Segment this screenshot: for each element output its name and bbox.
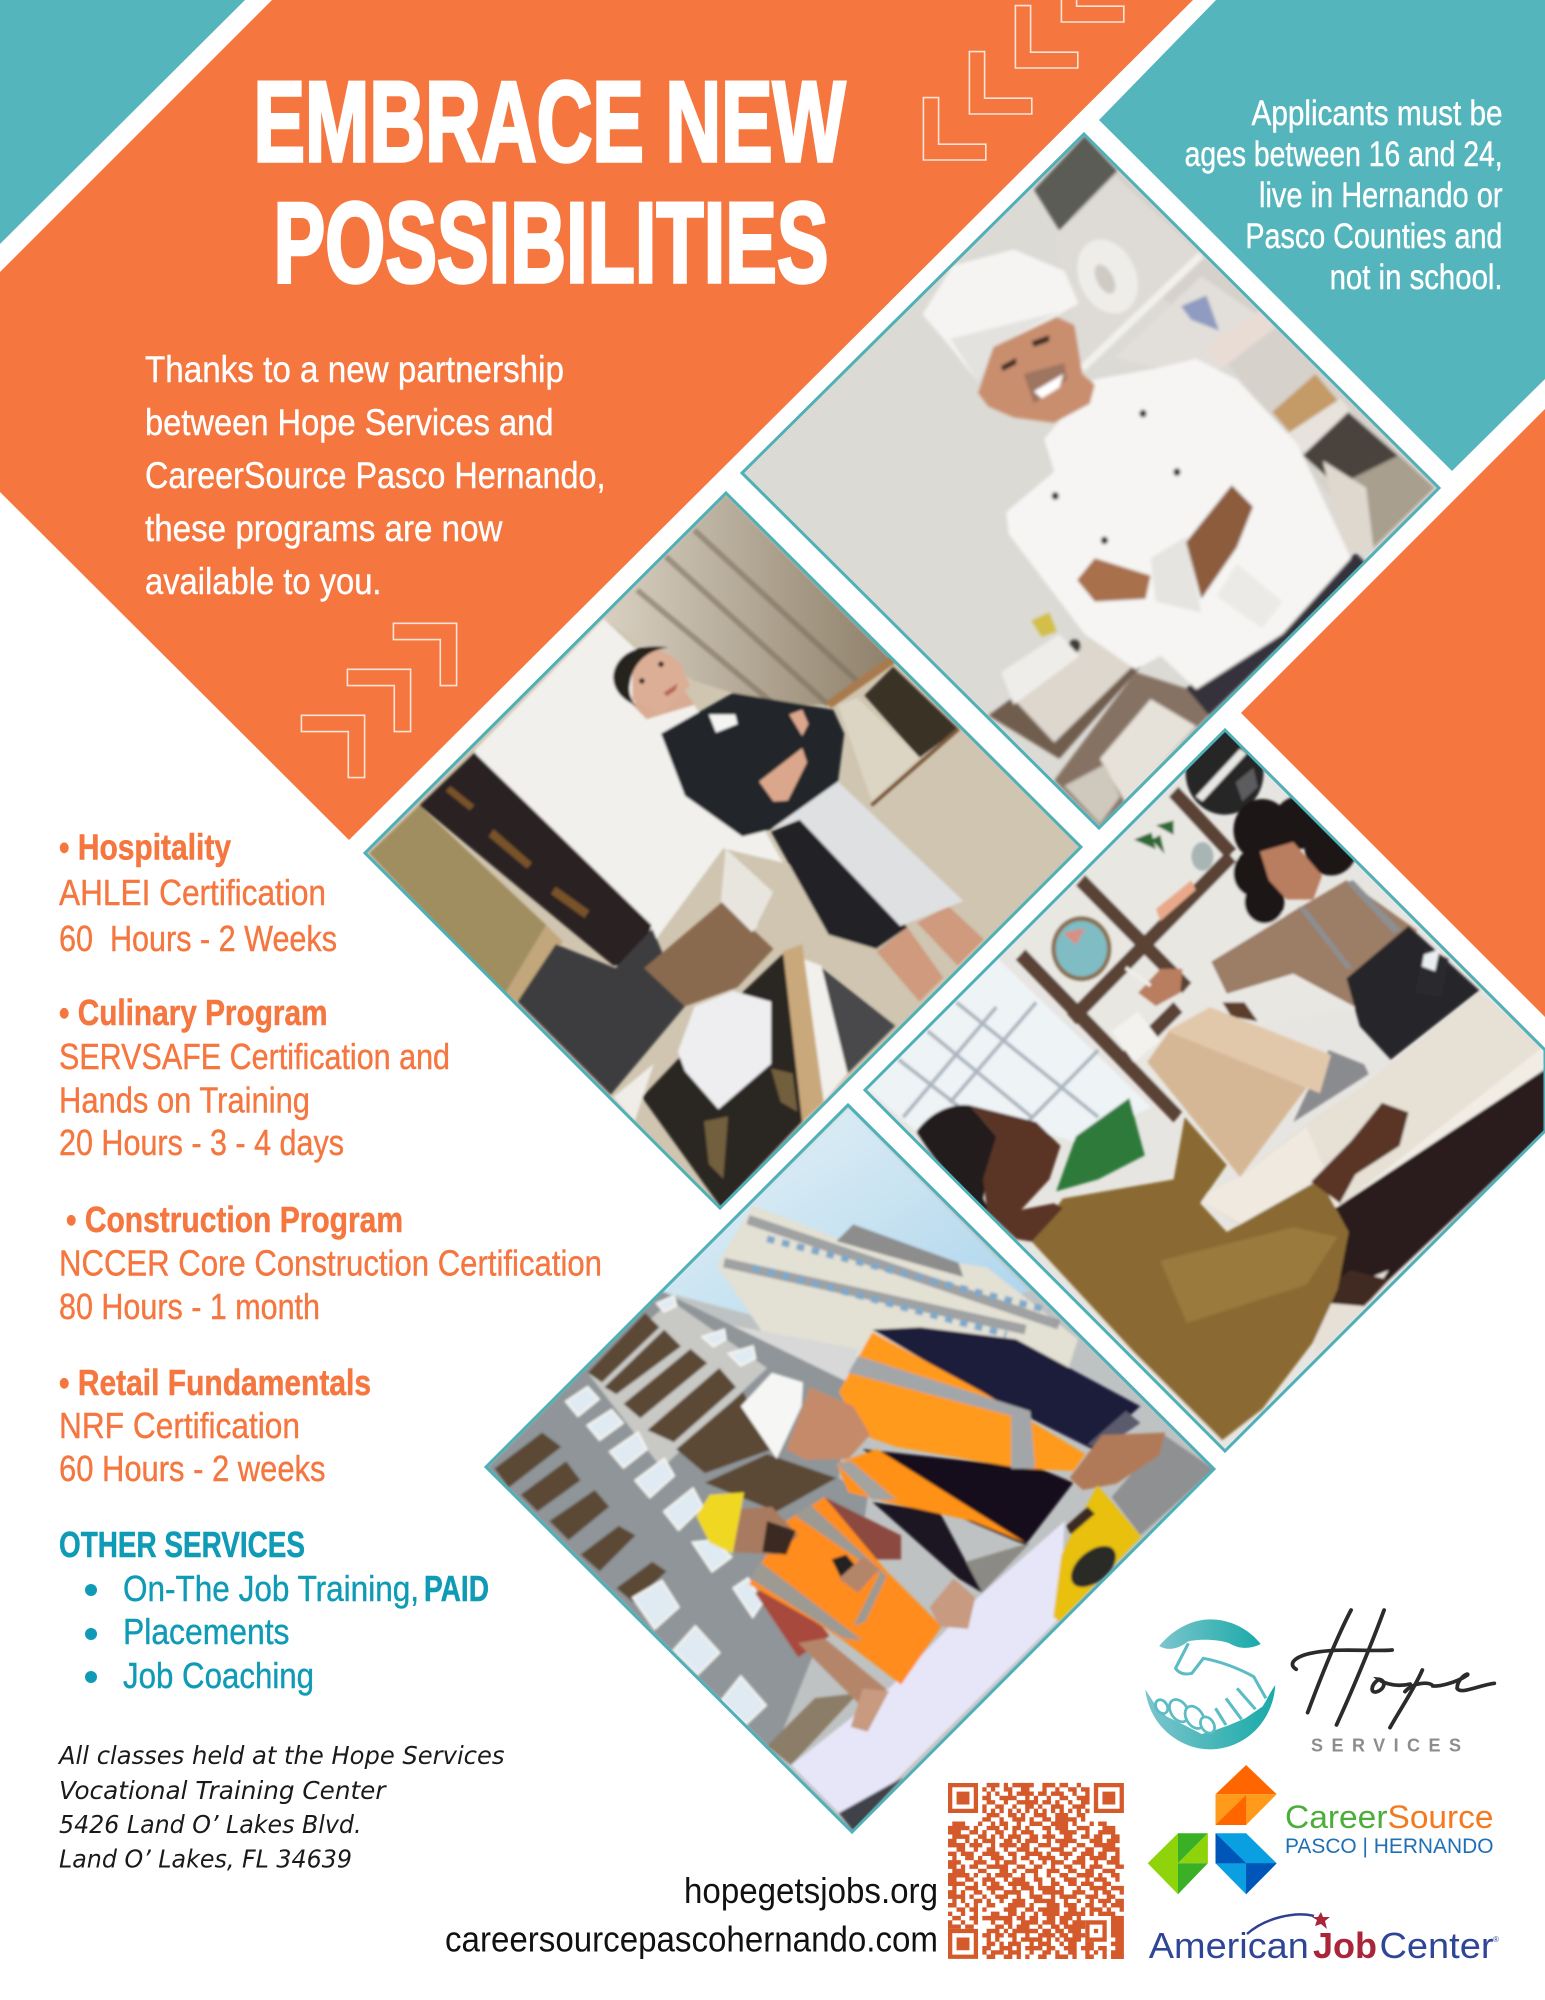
eligibility text: not in school. (1330, 258, 1503, 297)
address (57, 1741, 504, 1874)
teal corner triangle (0, 0, 245, 244)
program: hospitality: • Hospitality (59, 826, 231, 868)
plant (1056, 1098, 1145, 1191)
apron (1186, 553, 1366, 715)
eligibility text (1185, 94, 1503, 297)
photo: construction (480, 1100, 1230, 1850)
photo border: retail (865, 730, 1545, 1451)
woman (876, 927, 943, 1002)
wordmark: Hope (1292, 1610, 1494, 1728)
intro text (145, 349, 606, 602)
website links: careersourcepascohernando.com (445, 1918, 938, 1960)
logo: American Job Center: ® (1493, 1935, 1499, 1944)
program: retail (59, 1362, 371, 1489)
logo: CareerSource mark (1148, 1765, 1277, 1894)
intro text: available to you. (145, 561, 382, 602)
logo: American Job Center: Job (1313, 1925, 1377, 1966)
website links: hopegetsjobs.org (684, 1870, 938, 1911)
program: construction (59, 1199, 602, 1327)
photo border: chef (742, 134, 1439, 828)
other services (59, 1524, 489, 1696)
intro text: Thanks to a new partnership (145, 349, 564, 390)
program: culinary: • Culinary Program (59, 992, 328, 1033)
chef hat (922, 249, 1079, 382)
forearm (1186, 485, 1253, 599)
website links (445, 1870, 938, 1960)
arrows: top chevrons (923, 0, 1124, 160)
title (254, 59, 846, 307)
program: hospitality (59, 826, 337, 959)
program: retail: NRF Certification (59, 1405, 300, 1446)
other services: Job Coaching (123, 1655, 314, 1696)
program: retail: • Retail Fundamentals (59, 1362, 371, 1403)
program: culinary: 20 Hours - 3 - 4 days (59, 1122, 344, 1163)
intro text: between Hope Services and (145, 402, 554, 443)
eligibility text: Applicants must be (1252, 94, 1502, 133)
program: hospitality: 60 Hours - 2 Weeks (59, 918, 337, 959)
program: culinary (59, 992, 450, 1163)
logo: American Job Center: American (1149, 1925, 1309, 1966)
photo border: construction (486, 1105, 1214, 1832)
program: culinary: Hands on Training (59, 1080, 310, 1120)
logo text: CareerSource (1285, 1799, 1494, 1858)
address: All classes held at the Hope Services (57, 1741, 504, 1770)
other services: OTHER SERVICES (59, 1524, 305, 1565)
other services: Placements (123, 1611, 290, 1652)
logo: American Job Center (1149, 1912, 1499, 1966)
arrows: lower chevrons (301, 623, 457, 778)
program: hospitality: AHLEI Certification (59, 872, 326, 913)
title: POSSIBILITIES (274, 180, 828, 307)
paper bag (1146, 1030, 1307, 1178)
other services: PAID (424, 1568, 489, 1609)
logo text: SERVICES: SERVICES (1311, 1736, 1461, 1756)
jacket (1006, 359, 1351, 689)
shop assistant (1211, 880, 1417, 1007)
logo text: CareerSource: Career (1285, 1799, 1388, 1835)
blueprint paper (791, 1521, 1065, 1823)
program: construction: 80 Hours - 1 month (59, 1286, 320, 1327)
intro text: CareerSource Pasco Hernando, (145, 455, 606, 496)
icon: handshake (1145, 1619, 1275, 1749)
logo text: CareerSource: PASCO | HERNANDO (1285, 1835, 1494, 1858)
photo: chef (730, 120, 1450, 840)
other services: On-The Job Training, (123, 1568, 419, 1609)
logo: American Job Center: Center (1380, 1925, 1494, 1966)
counter (1205, 993, 1545, 1227)
address: Land O’ Lakes, FL 34639 (59, 1844, 352, 1874)
title: EMBRACE NEW (254, 59, 846, 186)
programs list (59, 826, 602, 1489)
orange header panel (0, 0, 1193, 840)
program: construction: NCCER Core Construction Certification (59, 1242, 602, 1284)
logo text: CareerSource: Source (1388, 1799, 1494, 1835)
spirit level (1053, 1485, 1141, 1622)
teal eligibility panel (1099, 0, 1545, 471)
face (978, 317, 1095, 423)
program: culinary: SERVSAFE Certification and (59, 1036, 450, 1077)
program: construction: • Construction Program (66, 1199, 403, 1240)
photo border: housekeeper (365, 493, 1081, 1208)
photo: housekeeper (367, 495, 1079, 1206)
photo: retail (860, 725, 1545, 1455)
logo: Hope Services (1145, 1610, 1494, 1749)
intro text: these programs are now (145, 508, 503, 549)
builder with white helmet (872, 1502, 982, 1593)
customer (1032, 1117, 1349, 1440)
builder with yellow helmet (965, 1540, 1030, 1593)
orange right panel (1241, 409, 1545, 1017)
program: retail: 60 Hours - 2 weeks (59, 1448, 326, 1489)
address: Vocational Training Center (59, 1776, 387, 1805)
address: 5426 Land O’ Lakes Blvd. (59, 1810, 362, 1839)
QR code (948, 1783, 1124, 1959)
eligibility text: live in Hernando or (1259, 176, 1503, 215)
